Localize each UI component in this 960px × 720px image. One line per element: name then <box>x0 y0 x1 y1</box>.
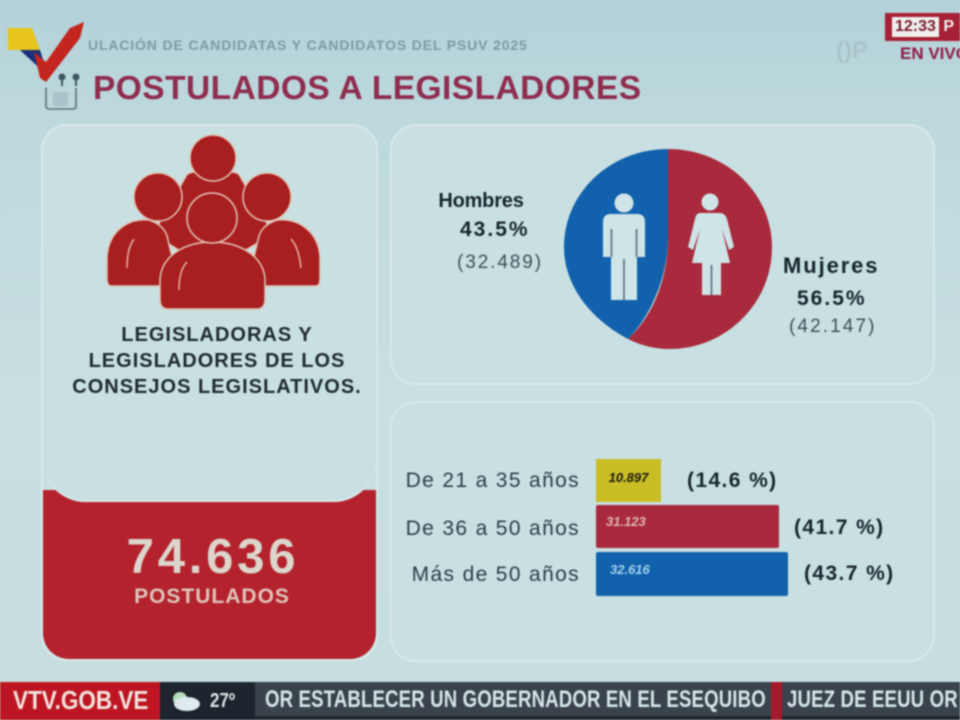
panel: gender split <box>390 124 935 385</box>
subtitle: ULACIÓN DE CANDIDATAS Y CANDIDATOS DEL PSUV 2025 <box>88 37 528 53</box>
weather <box>160 682 255 720</box>
bar <box>596 552 788 596</box>
percent: (14.6 %) <box>687 469 778 492</box>
panel: age groups <box>390 401 935 662</box>
site label <box>0 682 160 720</box>
news ticker <box>0 682 960 720</box>
icon: PSUV check logo <box>7 21 85 83</box>
title: POSTULADOS A LEGISLADORES <box>93 70 642 107</box>
total number: 74.636 <box>127 530 299 584</box>
site label: VTV.GOB.VE <box>13 685 148 715</box>
clock and live badge <box>884 12 960 63</box>
women label: Mujeres <box>783 253 879 278</box>
pie chart <box>563 148 773 350</box>
men percent: 43.5% <box>460 218 530 241</box>
headline one: OR ESTABLECER UN GOBERNADOR EN EL ESEQUIBO <box>265 686 766 713</box>
percent: (41.7 %) <box>794 516 885 539</box>
watermark logo: ()P <box>836 37 868 64</box>
bar: 32.616 <box>610 562 650 577</box>
bar <box>596 505 779 548</box>
headline two: JUEZ DE EEUU OR <box>787 686 958 713</box>
men label: Hombres <box>438 190 524 212</box>
description text <box>72 324 362 398</box>
age label: De 36 a 50 años <box>406 517 580 540</box>
clock: 12:33 <box>895 18 936 35</box>
age label: Más de 50 años <box>412 563 580 586</box>
women percent: 56.5% <box>797 287 867 310</box>
icon: group of people <box>106 134 322 310</box>
ticker separator <box>771 682 782 720</box>
clock <box>885 13 960 41</box>
description text: LEGISLADORES DE LOS <box>89 350 345 372</box>
bar: 31.123 <box>606 514 646 529</box>
women count: (42.147) <box>789 316 877 337</box>
percent: (43.7 %) <box>804 562 895 585</box>
row: over 50 <box>412 551 895 597</box>
temperature: 27º <box>210 690 235 712</box>
red footer block <box>43 490 376 659</box>
men count: (32.489) <box>457 252 543 273</box>
icon: ballot box <box>44 72 80 111</box>
panel: total postulados <box>41 124 378 661</box>
row: 21 to 35 <box>406 458 778 503</box>
bar <box>596 459 661 502</box>
icon: cloud and sun <box>172 691 201 712</box>
icon: man <box>603 194 645 300</box>
description text: CONSEJOS LEGISLATIVOS. <box>72 376 362 398</box>
light curved top <box>43 126 376 502</box>
description text: LEGISLADORAS Y <box>121 324 313 346</box>
clock: P <box>943 18 954 35</box>
total label: POSTULADOS <box>134 585 290 608</box>
icon: woman <box>688 194 734 295</box>
bar: 10.897 <box>609 470 648 485</box>
row: 36 to 50 <box>406 504 885 549</box>
age label: De 21 a 35 años <box>406 469 580 492</box>
